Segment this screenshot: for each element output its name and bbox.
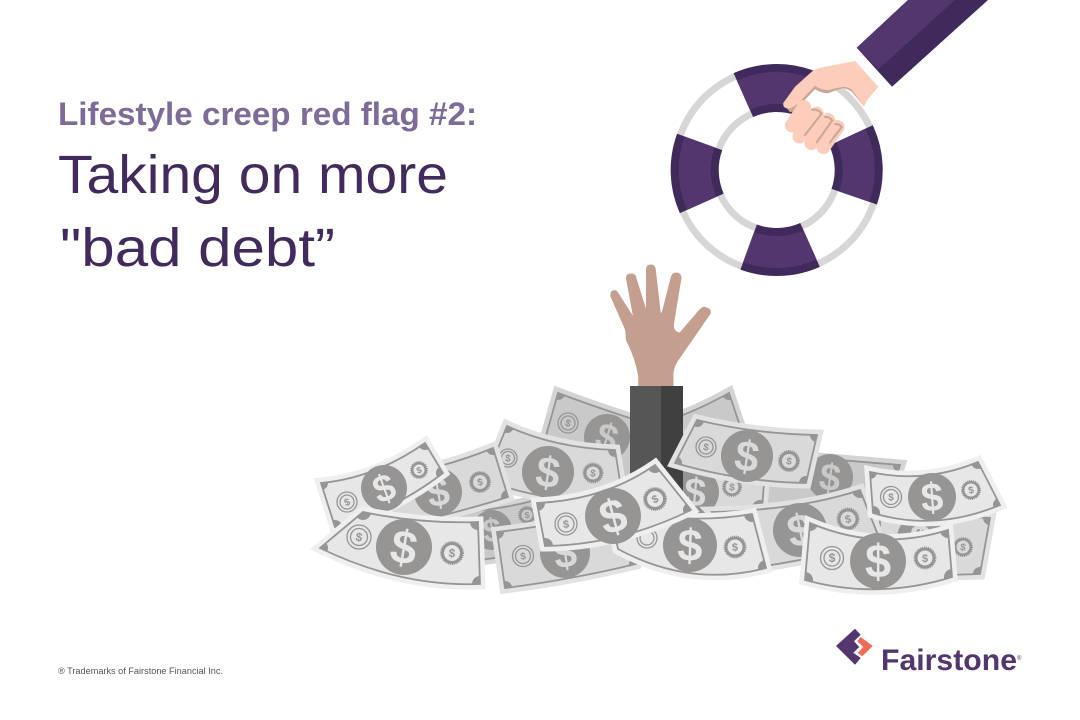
bill: small left tilted: $ xyxy=(367,466,402,513)
bill: center front tilted: $ xyxy=(650,493,661,507)
bill: top right of sleeve: $ xyxy=(702,442,710,454)
bill: back top right xyxy=(683,385,745,430)
bill: upper left center: $ xyxy=(504,453,512,465)
bill: behind sleeve center right: $ xyxy=(729,482,736,494)
bill: behind sleeve center right xyxy=(683,471,770,514)
bill: small left tilted: $ xyxy=(343,497,352,509)
bill: front bottom middle: $ xyxy=(677,519,703,571)
bill: top right of sleeve xyxy=(668,413,824,490)
trademark footnote: ® Trademarks of Fairstone Financial Inc. xyxy=(58,666,223,677)
drowning person's raised hand xyxy=(611,265,710,386)
bill: behind sleeve center right: $ xyxy=(682,470,708,516)
bill: far left back fragment: $ xyxy=(524,510,530,520)
bill: upper left center: $ xyxy=(533,448,563,498)
bill: lower left large xyxy=(312,504,488,592)
bill: far right back xyxy=(880,511,997,581)
bill: top far right: $ xyxy=(888,492,894,504)
bill: small left tilted: $ xyxy=(415,465,423,476)
bill: lower center: $ xyxy=(520,551,527,563)
Fairstone logo xyxy=(836,629,1022,677)
bill: center right wide: $ xyxy=(783,503,818,558)
bill: back right rectangle: $ xyxy=(816,456,843,501)
bill: front bottom right: $ xyxy=(922,553,928,565)
sleeve of the drowning person xyxy=(630,386,683,496)
bill: top far right: $ xyxy=(967,485,975,497)
bill: top right of sleeve: $ xyxy=(785,456,793,468)
bill: top far right xyxy=(863,455,1007,521)
Fairstone logo: ® xyxy=(1017,655,1022,662)
bill: mid left xyxy=(392,442,514,517)
lifebuoy ring xyxy=(668,61,886,279)
bill: center front tilted xyxy=(529,457,699,554)
bill: far right back: $ xyxy=(908,517,932,561)
title line 1: Taking on more xyxy=(58,145,448,205)
bill: top far right: $ xyxy=(919,475,945,521)
bill: center right wide xyxy=(704,482,880,566)
bill: front bottom right xyxy=(797,515,960,589)
bill: far right back: $ xyxy=(959,542,967,554)
bill: back right rectangle xyxy=(768,452,908,503)
bill: front bottom middle xyxy=(610,506,774,576)
bill: back top left xyxy=(541,386,686,476)
title line 2: "bad debt” xyxy=(60,218,335,278)
bill: back top left: $ xyxy=(563,418,572,430)
rescuer hand gripping ring xyxy=(783,61,878,147)
rescuer sleeve xyxy=(857,0,988,87)
Fairstone logo: Fairstone xyxy=(881,644,1017,677)
bill: center front tilted: $ xyxy=(594,487,632,545)
bill: lower left large: $ xyxy=(387,519,421,575)
bill: mid left: $ xyxy=(476,477,484,489)
bill: front bottom right: $ xyxy=(865,534,891,587)
bill: small left tilted xyxy=(314,436,450,534)
bill: center front tilted: $ xyxy=(563,519,570,531)
bill: lower center xyxy=(490,522,642,594)
bill: lower center: $ xyxy=(551,529,580,578)
bill: front bottom middle: $ xyxy=(732,542,738,554)
bill: front bottom right: $ xyxy=(829,551,836,565)
subtitle: red flag: Lifestyle creep red flag #2: xyxy=(58,96,477,132)
bill: far left back fragment: $ xyxy=(480,510,504,550)
bill: center right wide: $ xyxy=(844,513,852,526)
bill: back top left: $ xyxy=(590,415,623,461)
bill: upper left center xyxy=(495,418,625,499)
bill: lower left large: $ xyxy=(448,546,456,560)
bill: upper left center: $ xyxy=(589,468,597,480)
bill: far left back fragment xyxy=(420,492,560,560)
bill: lower left large: $ xyxy=(354,530,364,545)
bill: mid left: $ xyxy=(423,469,453,517)
bill: top right of sleeve: $ xyxy=(731,431,762,483)
